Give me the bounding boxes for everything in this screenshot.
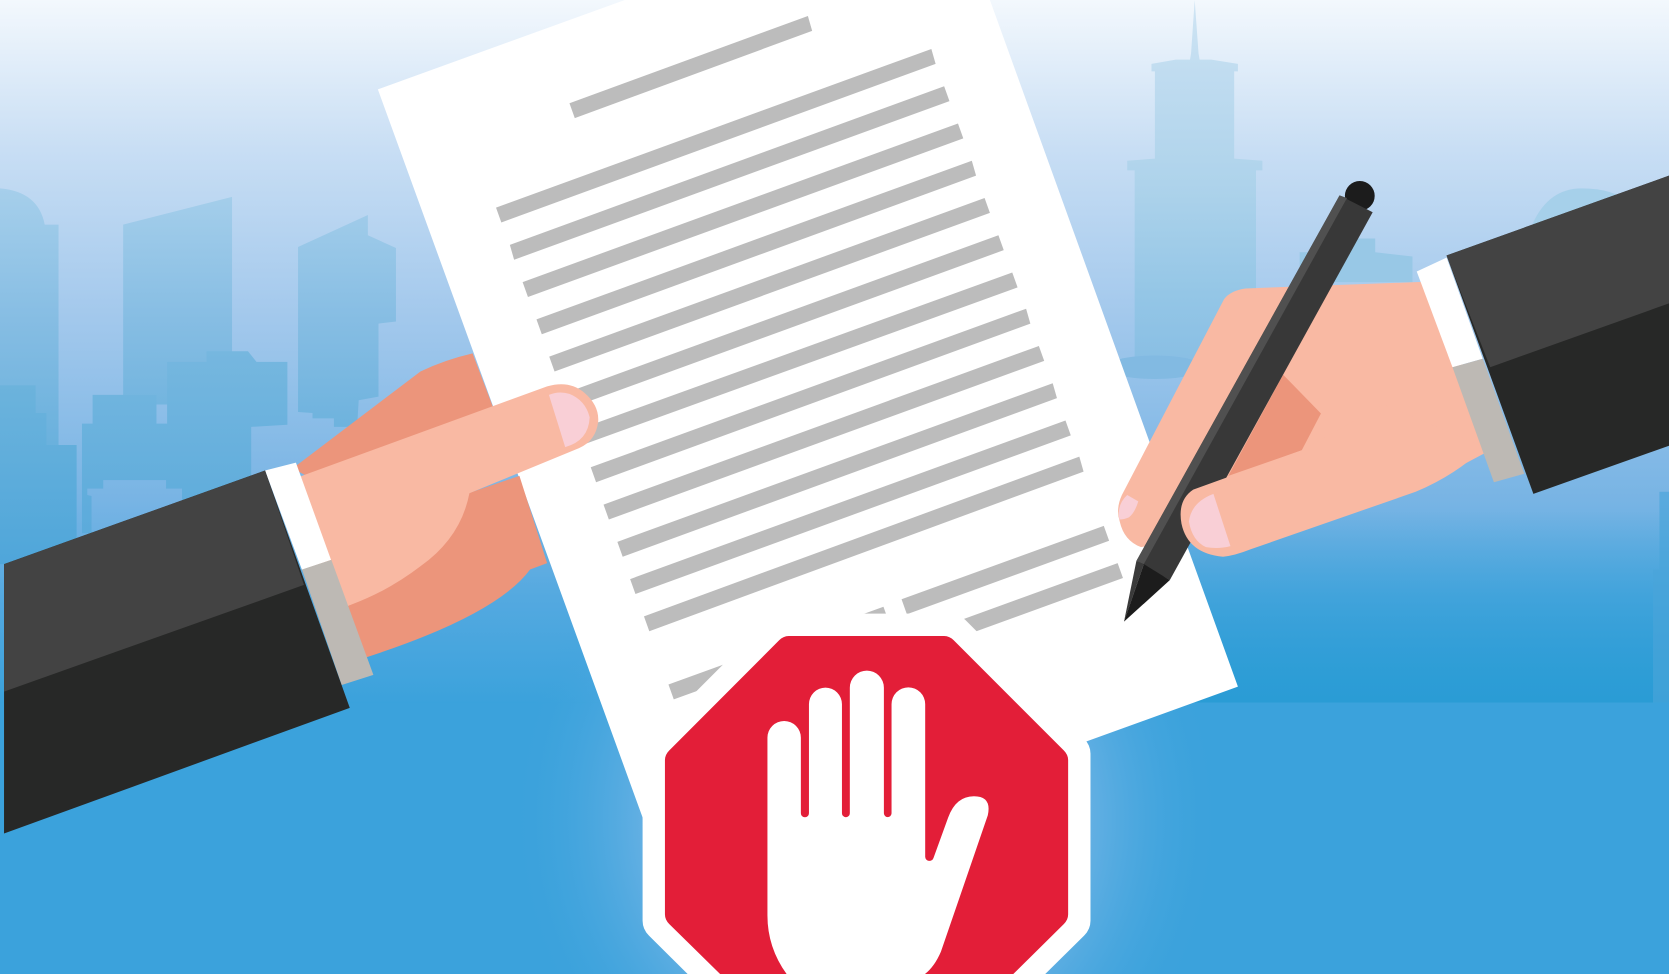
left front blocks	[82, 351, 287, 533]
left slanted building	[298, 215, 396, 427]
stop sign	[643, 614, 1090, 974]
pen nib left facet	[1124, 561, 1144, 622]
central spire tower	[1127, 0, 1262, 367]
left hand and finger	[287, 384, 598, 617]
left dome tower	[0, 188, 59, 564]
left hand palm shadow	[341, 476, 547, 662]
red octagon	[665, 636, 1068, 974]
document title line	[569, 16, 812, 118]
city skyline	[0, 0, 1669, 703]
pen nib right facet	[1124, 564, 1170, 622]
glow behind stop sign	[500, 639, 1235, 974]
left white shirt cuff	[265, 463, 331, 570]
left nearest block	[0, 385, 77, 564]
document body text lines	[496, 49, 1084, 631]
right little fingernail	[1119, 495, 1138, 519]
left tall building	[123, 197, 232, 405]
pen cap	[1345, 181, 1375, 211]
right dome	[1533, 188, 1629, 240]
pen barrel	[1136, 195, 1373, 580]
right lower buildings	[1653, 492, 1669, 703]
pen barrel highlight	[1136, 195, 1347, 564]
right hand shadow	[1228, 375, 1321, 476]
white sign border	[643, 614, 1090, 974]
right sleeve lower	[1447, 176, 1669, 494]
left sleeve upper	[4, 471, 304, 692]
right white shirt cuff	[1417, 258, 1483, 367]
left grey cuff	[302, 560, 373, 685]
white hand icon	[767, 671, 989, 974]
tower base shadow	[1106, 356, 1204, 379]
right arm signing with pen	[1118, 176, 1669, 622]
left sleeve lower	[4, 471, 350, 833]
right thumbnail	[1189, 494, 1230, 548]
left hand back shadow	[293, 353, 500, 500]
pen	[1124, 181, 1375, 622]
right hand	[1118, 282, 1490, 547]
left fingernail	[549, 392, 590, 447]
paper	[378, 0, 1238, 897]
left arm holding document	[4, 353, 598, 833]
right sleeve upper	[1447, 176, 1669, 367]
document sheet	[378, 0, 1238, 897]
right stepped building	[1300, 238, 1412, 282]
right thumb	[1181, 405, 1485, 557]
right grey cuff	[1452, 359, 1524, 482]
signature lines	[668, 526, 1123, 699]
